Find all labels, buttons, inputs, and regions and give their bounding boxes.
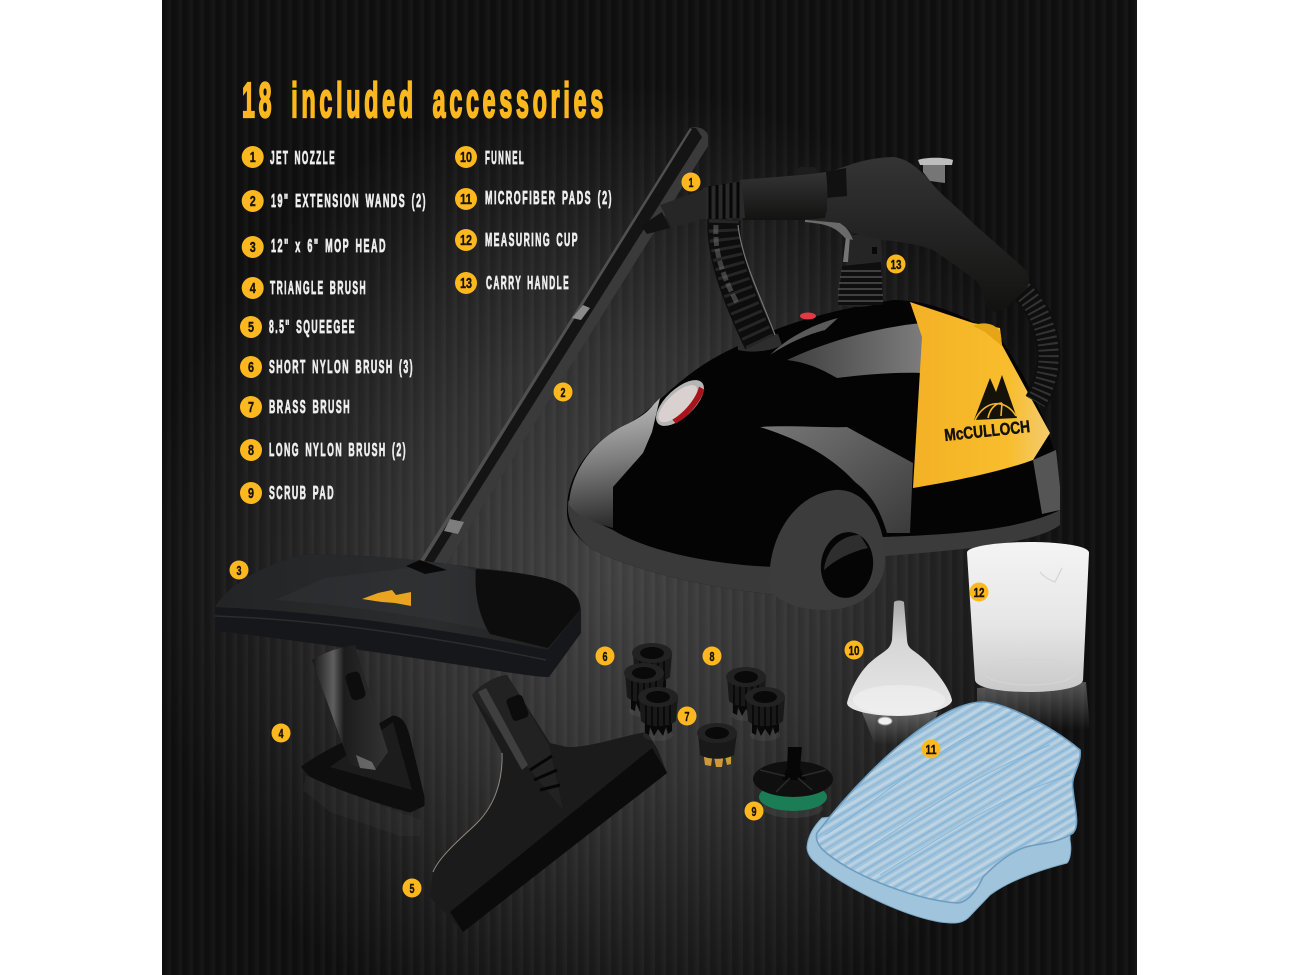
scrub pad [753, 747, 833, 818]
upper pad [816, 702, 1080, 903]
image callout 9: 9 [752, 804, 756, 819]
top button [797, 167, 817, 176]
cup reflection [977, 682, 1090, 730]
squeegee [430, 675, 667, 932]
legend item 11: 11 [460, 191, 472, 208]
logo mountains [974, 375, 1017, 420]
right corrugated hose [1022, 290, 1049, 402]
yellow cap [973, 323, 1002, 346]
logo arch [975, 403, 1016, 420]
image callout 5 [402, 878, 422, 898]
tube highlight [356, 755, 376, 770]
legend: numbered accessory list: 8.5" SQUEEGEE [269, 317, 356, 337]
legend: numbered accessory list: BRASS BRUSH [269, 397, 351, 417]
image callout 10: 10 [848, 643, 860, 658]
brush tube [312, 645, 388, 770]
legend item 3: 3 [250, 239, 256, 256]
yellow panel [910, 302, 1050, 488]
red button [800, 312, 816, 320]
mop logo [362, 590, 411, 606]
trigger [805, 218, 853, 240]
image callout 9 [744, 802, 764, 820]
image callout 1 [682, 172, 700, 192]
image callout 4: 4 [278, 726, 284, 741]
image callout 1: 1 [688, 175, 694, 190]
top highlight [787, 323, 922, 378]
legend: numbered accessory list: MEASURING CUP [485, 230, 579, 250]
jet nozzle [641, 189, 706, 234]
image callout 13: 13 [890, 257, 902, 272]
infographic scene [162, 0, 1137, 975]
legend item 2 [242, 190, 427, 212]
carry handle post [838, 226, 883, 307]
sight glass [649, 372, 711, 434]
legend: numbered accessory list: FUNNEL [485, 148, 525, 168]
left highlight [569, 398, 660, 528]
mop joint [406, 560, 447, 574]
legend item 9: 9 [248, 485, 254, 502]
legend: numbered accessory list [240, 146, 613, 504]
legend item 12 [455, 229, 579, 251]
legend item 3: 12" x 6" MOP HEAD [271, 236, 387, 256]
legend item 3 [242, 236, 387, 258]
legend item 10: 10 [460, 149, 472, 166]
right highlight [1033, 450, 1060, 514]
short nylon brushes [624, 643, 678, 741]
legend: numbered accessory list: SHORT NYLON BRUSH (3) [269, 357, 414, 377]
middle highlight [760, 426, 913, 533]
infographic scene: MICROFIBER PADS (2) [485, 188, 613, 208]
upper strip highlight [770, 318, 838, 355]
image callout 4 [272, 724, 290, 742]
infographic scene: 18 included accessories [242, 74, 607, 128]
extension wand [419, 127, 708, 565]
image callout 5: 5 [410, 881, 414, 896]
image callout 3 [230, 560, 248, 580]
legend item 7 [240, 396, 351, 418]
legend item 5 [240, 316, 356, 338]
image callout 8: 8 [710, 649, 714, 664]
microfiber pads [807, 702, 1080, 923]
legend item 8: 8 [248, 442, 254, 459]
wheel hub [817, 529, 877, 601]
legend item 13: 13 [460, 275, 472, 292]
image callout 7: 7 [684, 709, 690, 724]
funnel reflection [862, 712, 938, 745]
mop head [215, 555, 581, 677]
legend item 7: 7 [248, 399, 254, 416]
long nylon brushes [726, 667, 785, 741]
legend: numbered accessory list: SCRUB PAD [269, 483, 335, 503]
funnel [847, 600, 952, 725]
legend: numbered accessory list: 19" EXTENSION WANDS (2) [271, 191, 427, 211]
legend item 8 [240, 439, 407, 461]
image callout 12: 12 [974, 585, 984, 600]
legend item 9 [240, 482, 335, 504]
legend item 1: 1 [250, 149, 256, 166]
image callout 6: 6 [602, 649, 608, 664]
legend item 12: 12 [460, 232, 472, 249]
measuring cup [967, 542, 1089, 692]
image callout 11: 11 [926, 742, 936, 757]
legend item 10 [455, 146, 525, 168]
pad texture [825, 715, 1070, 875]
wheel [769, 490, 885, 610]
logo text: McCULLOCH [943, 417, 1031, 445]
handle grip [807, 157, 1029, 312]
legend item 6 [240, 356, 414, 378]
triangle brush [303, 645, 423, 836]
legend item 2: 2 [250, 193, 256, 210]
legend item 5: 5 [248, 319, 254, 336]
steam tube [740, 172, 827, 220]
image callout 7 [678, 706, 696, 726]
legend item 4 [242, 277, 367, 299]
silver cap [918, 158, 953, 183]
image callout 13 [886, 254, 906, 274]
dark panel background [162, 0, 1137, 975]
grip collar [825, 168, 847, 198]
legend: numbered accessory list: TRIANGLE BRUSH [270, 278, 367, 298]
steamer body [567, 300, 1060, 597]
hose collar [737, 334, 782, 352]
skirt right [880, 510, 1060, 556]
image callout 11 [922, 740, 940, 758]
left corrugated hose [716, 220, 775, 342]
squeegee neck [472, 675, 563, 810]
legend item 6: 6 [248, 359, 254, 376]
legend item 11 [455, 188, 613, 210]
legend item 13 [455, 272, 570, 294]
image callout 8 [702, 646, 722, 666]
legend item 1 [242, 146, 336, 168]
image callout 2: 2 [560, 385, 566, 400]
legend: numbered accessory list: JET NOZZLE [270, 148, 336, 168]
body lower skirt [568, 500, 800, 597]
image callout 6 [596, 646, 614, 666]
legend: numbered accessory list: LONG NYLON BRUSH (2) [269, 440, 407, 460]
legend item 4: 4 [250, 280, 256, 297]
legend: numbered accessory list: CARRY HANDLE [486, 273, 570, 293]
image callout 10 [844, 640, 864, 660]
lower pad [807, 790, 1071, 923]
steamer [567, 157, 1060, 610]
image callout 2 [554, 382, 572, 402]
brass brush [697, 723, 737, 767]
image callout 12 [970, 582, 988, 602]
image callout 3: 3 [236, 563, 242, 578]
nozzle ribs [703, 181, 745, 219]
